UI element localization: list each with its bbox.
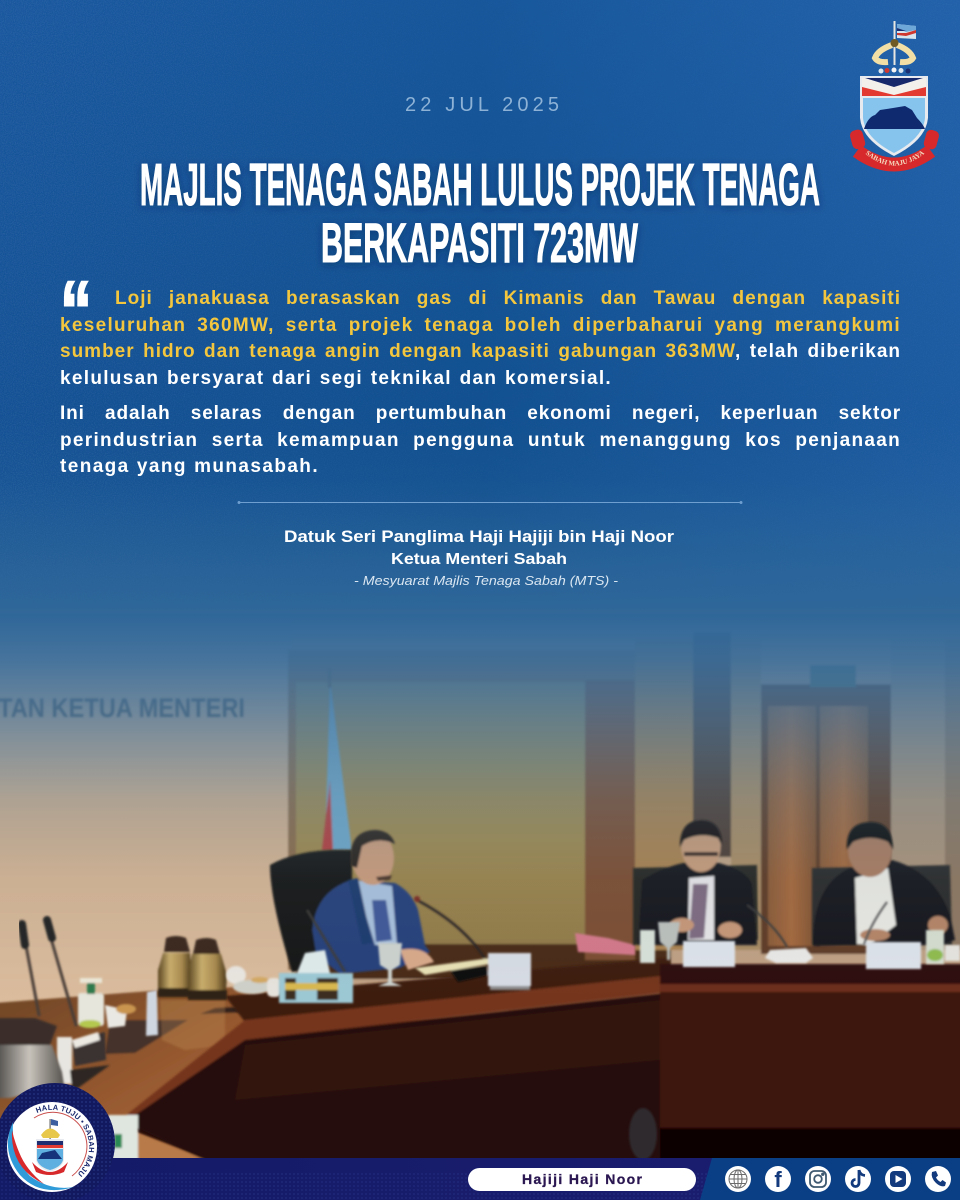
- quote line 2: keseluruhan 360MW, serta projek tenaga boleh diperbaharui yang merangkumi: [60, 315, 901, 336]
- divider: [238, 501, 742, 504]
- quote line 6: perindustrian serta kemampuan pengguna untuk menanggung kos penjanaan: [60, 430, 901, 451]
- badge blue swoosh: [8, 1122, 74, 1190]
- pink folders: [575, 933, 635, 955]
- name pill: Hajiji Haji Noor: [522, 1171, 643, 1187]
- quote line 5: Ini adalah selaras dengan pertumbuhan ekonomi negeri, keperluan sektor: [60, 403, 901, 424]
- icon: website globe: [725, 1166, 751, 1192]
- meeting room photo: [0, 610, 960, 1160]
- leather chair for chief minister: [270, 850, 352, 972]
- icon: phone: [925, 1166, 951, 1192]
- wall signage: TAN KETUA MENTERI: [0, 693, 245, 723]
- crest arms: [875, 39, 913, 74]
- crest motto: SABAH MAJU JAYA: [866, 150, 924, 166]
- crest flag: [894, 21, 916, 65]
- photo base tone: [0, 610, 960, 1158]
- left table surface: [0, 985, 300, 1158]
- desk microphones and nameplate: [307, 896, 531, 990]
- crest: Sabah coat of arms: [850, 21, 939, 172]
- chief minister: [312, 830, 434, 974]
- badge red swoosh: [12, 1130, 44, 1184]
- name pill: [468, 1168, 696, 1191]
- icon: facebook: f: [774, 1167, 782, 1192]
- microphones on the left: [22, 920, 76, 1025]
- quote line 3: sumber hidro dan tenaga angin dengan kapasiti gabungan 363MW, telah diberikan: [60, 341, 901, 362]
- date: 22 JUL 2025: [405, 94, 559, 116]
- speaker attribution: - Mesyuarat Majlis Tenaga Sabah (MTS) -: [354, 573, 619, 588]
- footer bar: [0, 1158, 960, 1200]
- icon: tiktok: [845, 1166, 871, 1192]
- opening quotation mark: “: [60, 264, 92, 358]
- second attendee: [633, 820, 758, 945]
- crest ribbon: [849, 128, 940, 164]
- tissue box and glass: [279, 943, 402, 1003]
- nameplates and conference unit: [629, 902, 960, 1160]
- silver thermos: [0, 1018, 64, 1098]
- quote line 7: tenaga yang munasabah.: [60, 456, 319, 477]
- headline: [140, 152, 820, 274]
- badge crest: [32, 1119, 68, 1175]
- badge inner ring: [34, 1112, 87, 1176]
- quote line 4: kelulusan bersyarat dari segi teknikal dan komersial.: [60, 368, 612, 389]
- speaker attribution: Datuk Seri Panglima Haji Hajiji bin Haji Noor: [284, 527, 674, 546]
- icon: youtube: [885, 1166, 911, 1192]
- blue background: [0, 0, 960, 565]
- crest shield: [860, 76, 928, 156]
- blue fade over photo: [0, 480, 960, 1000]
- gold thermos pair: [158, 936, 227, 1000]
- icon: facebook: [765, 1166, 791, 1192]
- third attendee: [812, 822, 955, 946]
- table items: bottle, papers and snacks: [57, 978, 158, 1088]
- cups and saucer: [226, 966, 281, 997]
- Sabah flag on pole: [322, 668, 352, 850]
- quote line 1: Loji janakuasa berasaskan gas di Kimanis dan Tawau dengan kapasiti: [115, 288, 901, 309]
- speaker attribution: [284, 527, 674, 588]
- room walls and joinery: [0, 610, 960, 1020]
- round campaign badge: [0, 1083, 115, 1200]
- quote body: [60, 288, 901, 477]
- headline: BERKAPASITI 723MW: [321, 211, 638, 274]
- speaker attribution: Ketua Menteri Sabah: [391, 551, 567, 568]
- icon: instagram: [805, 1166, 831, 1192]
- main table front panels: [108, 958, 960, 1160]
